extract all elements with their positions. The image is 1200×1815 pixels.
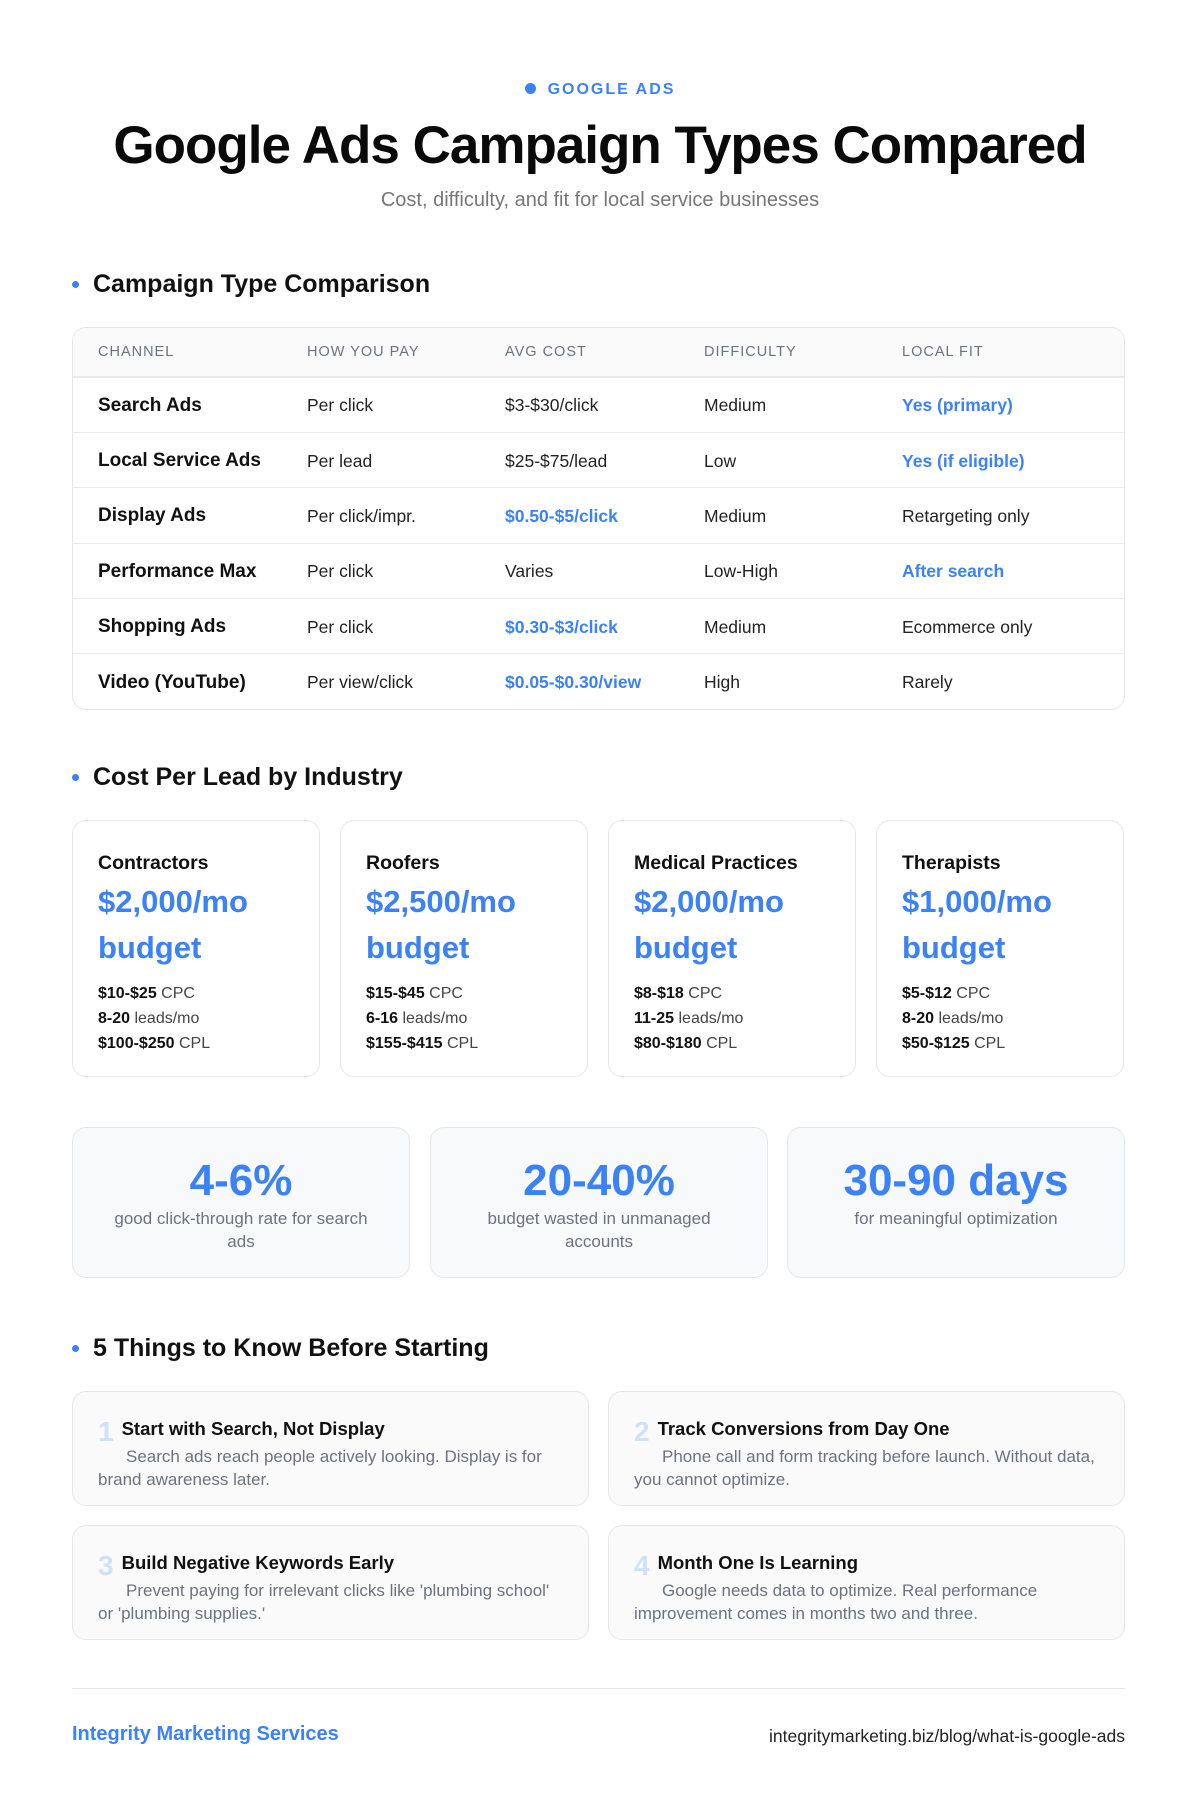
comparison table: Medium — [704, 506, 766, 526]
tip 2: Phone call and form tracking before launch. Without data, you cannot optimize. — [634, 1447, 1095, 1489]
comparison table: CHANNEL — [98, 344, 174, 360]
card: medical: $80-$180 CPL — [634, 1035, 737, 1052]
comparison table: Yes (if eligible) — [902, 451, 1025, 471]
stat: CTR: good click-through rate for search ads — [114, 1209, 368, 1251]
tip 1: Search ads reach people actively looking. Display is for brand awareness later. — [98, 1447, 542, 1489]
comparison table: LOCAL FIT — [902, 344, 984, 360]
stat: CTR: 4-6% — [190, 1156, 292, 1205]
comparison table: $0.05-$0.30/view — [505, 672, 641, 692]
comparison table: Per click — [307, 561, 373, 581]
comparison table: Per lead — [307, 451, 372, 471]
card: contractors: $100-$250 CPL — [98, 1035, 210, 1052]
comparison table: Low — [704, 451, 736, 471]
card: therapists: $50-$125 CPL — [902, 1035, 1005, 1052]
comparison table: Display Ads — [98, 505, 206, 526]
heading: cost per lead: Cost Per Lead by Industry — [93, 763, 403, 791]
comparison table: HOW YOU PAY — [307, 344, 420, 360]
card: medical: $8-$18 CPC — [634, 985, 722, 1002]
stat: wasted budget: 20-40% — [523, 1156, 675, 1205]
comparison table: Video (YouTube) — [98, 672, 246, 693]
comparison table: Per click/impr. — [307, 506, 416, 526]
heading: campaign comparison: Campaign Type Comparison — [93, 270, 430, 298]
tip 4: Google needs data to optimize. Real performance improvement comes in months two and three. — [634, 1581, 1037, 1623]
card: roofers: $2,500/mo budget — [366, 884, 516, 965]
stat: CTR — [72, 1127, 410, 1278]
comparison table: Local Service Ads — [98, 450, 261, 471]
comparison table: Rarely — [902, 672, 953, 692]
card: contractors — [72, 820, 320, 1077]
tip 2 — [608, 1391, 1125, 1506]
comparison table: Per click — [307, 395, 373, 415]
comparison table — [72, 327, 1125, 710]
tip 4: 4 Month One Is Learning — [634, 1550, 858, 1581]
card: therapists: $1,000/mo budget — [902, 884, 1052, 965]
comparison table: Per click — [307, 617, 373, 637]
tip 4 — [608, 1525, 1125, 1640]
comparison table: Ecommerce only — [902, 617, 1032, 637]
card: roofers: $155-$415 CPL — [366, 1035, 478, 1052]
comparison table: Low-High — [704, 561, 778, 581]
tip 3: Prevent paying for irrelevant clicks like 'plumbing school' or 'plumbing supplies.' — [98, 1581, 549, 1623]
comparison table: Yes (primary) — [902, 395, 1013, 415]
footer brand: Integrity Marketing Services — [72, 1723, 339, 1745]
footer url: integritymarketing.biz/blog/what-is-google-ads — [769, 1726, 1125, 1746]
comparison table: DIFFICULTY — [704, 344, 797, 360]
comparison table: Retargeting only — [902, 506, 1029, 526]
tip 1 — [72, 1391, 589, 1506]
stat: optimization: 30-90 days — [843, 1156, 1069, 1205]
eyebrow label: GOOGLE ADS — [548, 81, 675, 98]
card: roofers: $15-$45 CPC — [366, 985, 463, 1002]
card: therapists: Therapists — [902, 852, 1001, 874]
comparison table: Search Ads — [98, 395, 202, 416]
tip 1: 1 Start with Search, Not Display — [98, 1416, 385, 1447]
card: contractors: $10-$25 CPC — [98, 985, 195, 1002]
heading: 5 things: 5 Things to Know Before Starting — [93, 1334, 489, 1362]
comparison table: Shopping Ads — [98, 616, 226, 637]
comparison table: AVG COST — [505, 344, 587, 360]
comparison table: $0.30-$3/click — [505, 617, 618, 637]
comparison table: $3-$30/click — [505, 395, 598, 415]
card: contractors: $2,000/mo budget — [98, 884, 248, 965]
stat: optimization — [787, 1127, 1125, 1278]
subtitle: Cost, difficulty, and fit for local service businesses — [381, 189, 819, 211]
card: therapists — [876, 820, 1124, 1077]
card: contractors: Contractors — [98, 852, 209, 874]
comparison table: Medium — [704, 617, 766, 637]
comparison table: Performance Max — [98, 561, 256, 582]
stat: wasted budget — [430, 1127, 768, 1278]
card: roofers: Roofers — [366, 852, 440, 874]
comparison table: High — [704, 672, 740, 692]
card: medical: 11-25 leads/mo — [634, 1010, 743, 1027]
card: roofers — [340, 820, 588, 1077]
card: roofers: 6-16 leads/mo — [366, 1010, 467, 1027]
comparison table: Varies — [505, 561, 553, 581]
comparison table: $25-$75/lead — [505, 451, 607, 471]
card: medical — [608, 820, 856, 1077]
card: therapists: 8-20 leads/mo — [902, 1010, 1003, 1027]
tip 3: 3 Build Negative Keywords Early — [98, 1550, 394, 1581]
title: Google Ads Campaign Types Compared — [113, 116, 1087, 175]
stat: wasted budget: budget wasted in unmanaged accounts — [487, 1209, 711, 1251]
tip 2: 2 Track Conversions from Day One — [634, 1416, 950, 1447]
comparison table: Medium — [704, 395, 766, 415]
card: medical: Medical Practices — [634, 852, 798, 874]
comparison table: After search — [902, 561, 1004, 581]
card: medical: $2,000/mo budget — [634, 884, 784, 965]
card: therapists: $5-$12 CPC — [902, 985, 990, 1002]
comparison table: $0.50-$5/click — [505, 506, 618, 526]
comparison table: Per view/click — [307, 672, 413, 692]
stat: optimization: for meaningful optimization — [854, 1209, 1058, 1228]
card: contractors: 8-20 leads/mo — [98, 1010, 199, 1027]
tip 3 — [72, 1525, 589, 1640]
